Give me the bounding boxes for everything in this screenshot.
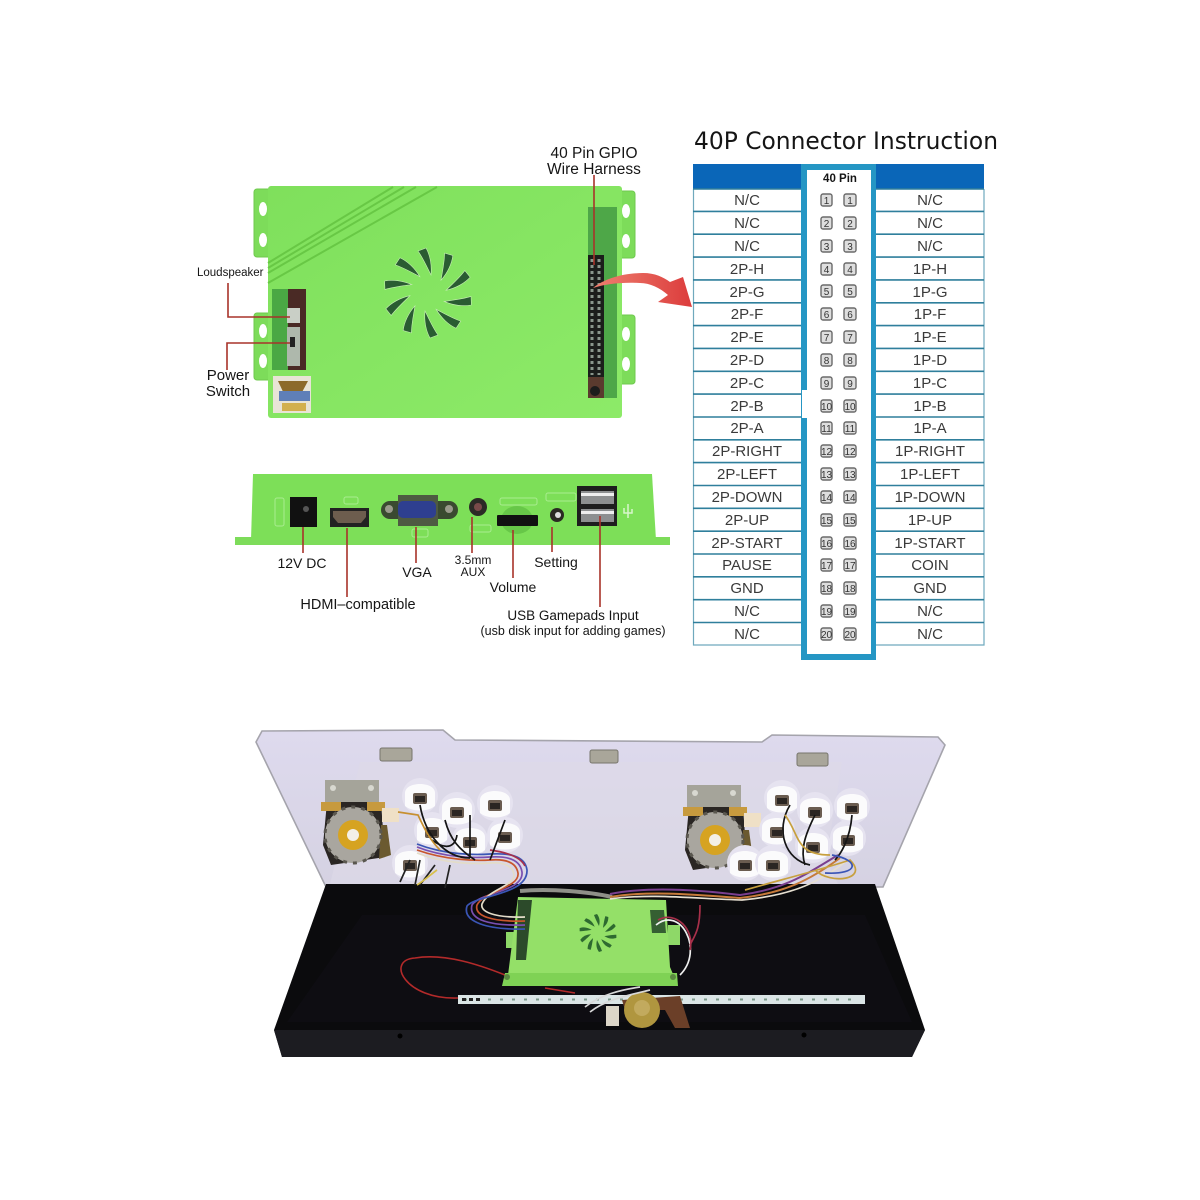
pin number column: 1 xyxy=(847,196,853,207)
left signal column: 2P-G xyxy=(729,284,765,301)
left signal column: N/C xyxy=(734,192,760,209)
arrow: connector to pin table xyxy=(593,273,692,307)
pin number column: 13 xyxy=(821,470,832,481)
red wire loop xyxy=(401,957,575,998)
port: AUX xyxy=(469,498,487,516)
diagonal ribs xyxy=(268,187,437,283)
40-pin connector table xyxy=(693,164,984,660)
pin number column: 8 xyxy=(847,356,853,367)
left signal column: 2P-C xyxy=(730,375,764,392)
right signal column: GND xyxy=(913,580,947,597)
port callouts: VGA xyxy=(402,564,432,580)
pin number column: 17 xyxy=(821,561,832,572)
left port window xyxy=(272,289,306,370)
lid inner panel shading xyxy=(330,762,842,884)
pin number column: 2 xyxy=(824,219,830,230)
right signal column: 1P-H xyxy=(913,261,947,278)
case side xyxy=(235,537,670,545)
left signal column: 2P-LEFT xyxy=(717,466,777,483)
pin number column: 5 xyxy=(847,287,853,298)
left signal column: N/C xyxy=(734,626,760,643)
left signal column: PAUSE xyxy=(722,557,772,574)
port callouts: 3.5mm xyxy=(455,553,491,567)
pin number column: 7 xyxy=(847,333,853,344)
small silkscreen labels xyxy=(275,493,576,537)
photo: open arcade console xyxy=(256,730,945,1057)
right signal column: 1P-START xyxy=(894,535,966,552)
callout: 40 pin GPIO wire harness: Wire Harness xyxy=(547,161,641,178)
port callouts: (usb disk input for adding games) xyxy=(480,623,666,638)
callout: 40 pin GPIO wire harness: 40 Pin GPIO xyxy=(550,145,638,162)
left signal column: N/C xyxy=(734,215,760,232)
table header xyxy=(693,164,984,189)
pin number column: 2 xyxy=(847,219,853,230)
base floor xyxy=(287,915,912,1022)
right button wires xyxy=(783,805,852,865)
right buttons xyxy=(727,780,870,881)
left buttons xyxy=(392,778,523,881)
port callouts: 12V DC xyxy=(277,555,327,571)
pin number column: 40 Pin xyxy=(823,173,857,185)
pin number column: 6 xyxy=(847,310,853,321)
left signal column: 2P-E xyxy=(730,329,764,346)
port callouts: Volume xyxy=(490,579,537,595)
pin number column: 13 xyxy=(844,470,856,481)
right signal column: 1P-C xyxy=(913,375,947,392)
right signal column xyxy=(876,189,984,645)
pin number column: 10 xyxy=(821,402,832,413)
right signal column: 1P-B xyxy=(913,398,947,415)
pin number column: 15 xyxy=(844,516,856,527)
left signal column: N/C xyxy=(734,238,760,255)
right signal column: COIN xyxy=(911,557,949,574)
pin number column: 18 xyxy=(844,584,856,595)
callout: loudspeaker xyxy=(197,267,290,317)
callout: power switch: Switch xyxy=(206,383,250,400)
left signal column: 2P-D xyxy=(730,352,764,369)
left signal column: 2P-UP xyxy=(725,512,769,529)
button wires left xyxy=(420,805,505,860)
right signal column: 1P-A xyxy=(913,420,947,437)
left signal column: 2P-DOWN xyxy=(712,489,782,506)
pin number column: 16 xyxy=(844,539,856,550)
pin number column: 11 xyxy=(821,424,832,435)
right signal column: N/C xyxy=(917,603,943,620)
port callouts xyxy=(277,516,666,638)
pin number column: 14 xyxy=(844,493,856,504)
pin number column: 6 xyxy=(824,310,830,321)
pin number column: 10 xyxy=(844,402,856,413)
left signal column xyxy=(693,189,801,645)
pin number column: 1 xyxy=(824,196,830,207)
LED strip xyxy=(458,995,865,1004)
right signal column: N/C xyxy=(917,626,943,643)
port: HDMI xyxy=(330,508,369,527)
logo sticker xyxy=(273,376,311,413)
pin number column: 9 xyxy=(847,379,853,390)
top view of green game board xyxy=(254,186,635,418)
port: setting xyxy=(550,508,564,522)
pin number column: 11 xyxy=(845,424,856,435)
pin number column: 19 xyxy=(821,607,832,618)
pin number column: 4 xyxy=(824,265,830,276)
left signal column: 2P-H xyxy=(730,261,764,278)
silver sleeve xyxy=(520,890,612,897)
pin number column: 15 xyxy=(821,516,832,527)
side view of game board with ports xyxy=(235,474,670,545)
right connector window xyxy=(588,207,617,398)
port: DC jack xyxy=(290,497,317,527)
pin number column: 17 xyxy=(844,561,856,572)
right signal column: 1P-RIGHT xyxy=(895,443,965,460)
right signal column: 1P-G xyxy=(912,284,948,301)
pin number column: 12 xyxy=(844,447,856,458)
right signal column: N/C xyxy=(917,215,943,232)
left joystick xyxy=(321,780,399,865)
callout: 40 pin GPIO wire harness xyxy=(547,145,641,265)
left signal column: GND xyxy=(730,580,764,597)
right signal column: N/C xyxy=(917,192,943,209)
speaker xyxy=(606,992,690,1028)
board right wires xyxy=(656,920,690,975)
right signal column: 1P-LEFT xyxy=(900,466,960,483)
wire harness bundles xyxy=(398,805,855,1012)
pin number column: 16 xyxy=(821,539,832,550)
pin number column: 14 xyxy=(821,493,832,504)
port: VGA xyxy=(381,495,458,526)
pin number column: 5 xyxy=(824,287,830,298)
pin number column: 12 xyxy=(821,447,832,458)
right signal column: 1P-F xyxy=(914,306,946,323)
pin number column: 8 xyxy=(824,356,830,367)
port callouts: Setting xyxy=(534,554,578,570)
right signal column: N/C xyxy=(917,238,943,255)
console base xyxy=(274,884,925,1057)
left bundle to board xyxy=(417,847,525,925)
left signal column: 2P-RIGHT xyxy=(712,443,782,460)
left signal column: 2P-F xyxy=(731,306,763,323)
pin number column: 20 xyxy=(821,630,832,641)
right signal column: 1P-UP xyxy=(908,512,952,529)
lid clips xyxy=(380,748,828,766)
green board in console xyxy=(502,897,680,986)
left signal column: 2P-START xyxy=(711,535,783,552)
pin number column: 20 xyxy=(844,630,856,641)
pin number column xyxy=(821,173,857,641)
callout: loudspeaker: Loudspeaker xyxy=(197,267,264,279)
USB symbol xyxy=(624,504,632,518)
port callouts: HDMI–compatible xyxy=(300,597,416,613)
right signal column: 1P-D xyxy=(913,352,947,369)
left signal column: N/C xyxy=(734,603,760,620)
base front face xyxy=(274,1030,925,1057)
centre pin column frame xyxy=(801,164,876,660)
mounting ears xyxy=(254,189,635,384)
pin number column: 4 xyxy=(847,265,853,276)
left signal column: 2P-B xyxy=(730,398,764,415)
acrylic lid xyxy=(256,730,945,887)
pin number column: 7 xyxy=(824,333,830,344)
right joystick xyxy=(683,785,761,870)
fan grill xyxy=(382,248,474,338)
title: 40P connector instruction: 40P Connector Instruction xyxy=(694,127,998,155)
left signal column: 2P-A xyxy=(730,420,764,437)
right bundle across board xyxy=(610,858,840,898)
pin number column: 18 xyxy=(821,584,832,595)
right signal column: 1P-DOWN xyxy=(895,489,965,506)
callout: power switch: Power xyxy=(207,367,249,384)
port callouts: AUX xyxy=(461,565,485,579)
port: USB xyxy=(577,486,617,526)
callout: power switch xyxy=(206,343,290,400)
pin number column: 19 xyxy=(844,607,856,618)
right signal column: 1P-E xyxy=(913,329,947,346)
green case body xyxy=(268,186,622,418)
port callouts: USB Gamepads Input xyxy=(507,608,639,623)
pin number column: 3 xyxy=(824,242,830,253)
port: volume wheel xyxy=(497,506,538,534)
pin number column: 3 xyxy=(847,242,853,253)
pin number column: 9 xyxy=(824,379,830,390)
